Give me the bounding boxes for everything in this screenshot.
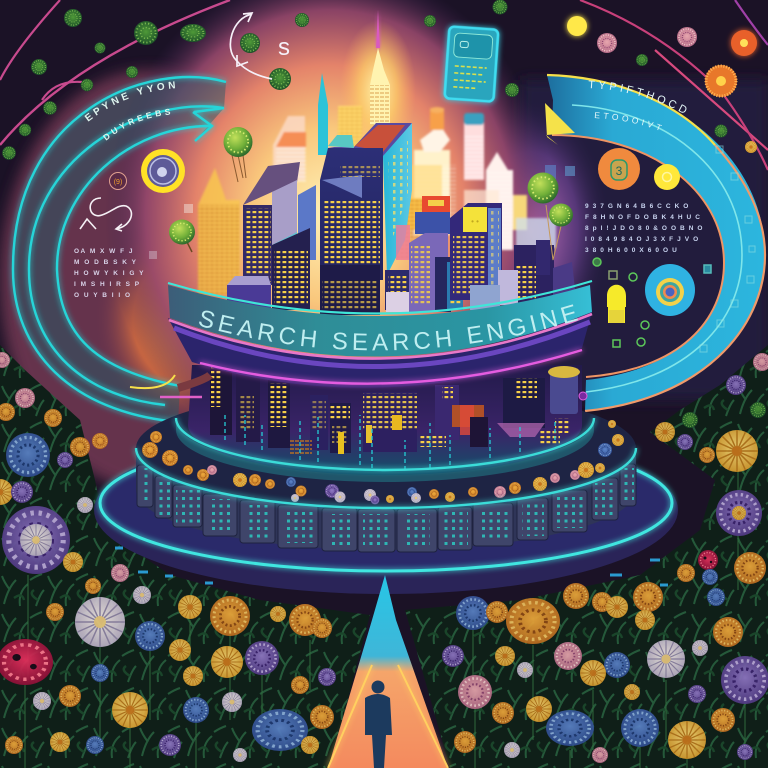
small green glyphs: [593, 258, 711, 347]
left text block: O U Y B I I O: [74, 292, 132, 299]
middle cylinder base: [176, 420, 594, 482]
light path: [328, 575, 448, 768]
search engine top band: SEARCH SEARCH ENGINE: [199, 304, 578, 350]
left text block: [74, 248, 145, 299]
server ring wall: [136, 450, 636, 550]
pink glow right of city: [450, 100, 610, 360]
band small squares: [700, 146, 755, 352]
path edges: [328, 665, 448, 768]
red sign and tower: [415, 196, 450, 234]
left panel icons: [74, 149, 193, 299]
upper city: dark foreground buildings: [227, 123, 576, 315]
top white arrow and S: [230, 13, 290, 79]
lower city: [188, 365, 587, 475]
right text block: I 0 8 4 9 8 4 O J 3 X F J V O: [585, 236, 699, 243]
yellow sign building: • •: [471, 217, 479, 226]
yellow pink arrow tail: [130, 375, 210, 397]
person silhouette: [365, 680, 392, 768]
top white arrow and S: s: [278, 34, 290, 61]
band outer edge: [547, 75, 715, 145]
left arrow labels: [84, 81, 175, 140]
pale buildings: [198, 106, 556, 295]
left curved arrows: [13, 77, 226, 422]
right panel icons: [545, 148, 711, 347]
lilac block tower: [409, 233, 463, 312]
icon: orange circle: [598, 148, 640, 190]
mid blue building behind: [272, 185, 316, 310]
left arrow labels: DUYREEBS: [102, 108, 170, 140]
orange glow: [95, 210, 285, 430]
right text block: 3 8 0 H 6 0 0 X 6 0 O U: [585, 247, 678, 254]
middle cylinder neon rim: [176, 418, 594, 470]
right cluster buildings: [227, 240, 576, 315]
tiny flower row: [142, 420, 624, 504]
orange dandelions top right: [567, 16, 757, 97]
right dark backdrop: [520, 80, 768, 400]
left warm backdrop: [0, 70, 300, 490]
base neon ring: [100, 435, 672, 571]
right text block: F 8 H N O F D O B K 4 H U C: [585, 214, 701, 221]
right arrow labels: TYPIFTHOCD: [588, 80, 686, 113]
icon: small coin: (9): [114, 179, 122, 186]
stems: [25, 470, 745, 768]
icon: white squiggle arrow: [80, 198, 131, 231]
right arrow labels: ETOOOIVT: [594, 112, 662, 130]
flowers right field: [442, 353, 768, 763]
right text block: 8 p l ! J D O 8 0 & O O B N O: [585, 225, 704, 232]
icon: yellow keyhole: [607, 285, 626, 323]
left text block: OA M X W F J: [74, 248, 134, 255]
icon: yellow circle: [654, 164, 680, 190]
right text block: [585, 203, 704, 254]
upper city: pale background towers: [198, 10, 556, 295]
band top rim: [168, 281, 592, 314]
green floating flowers top: [2, 0, 757, 160]
yellow arrowhead: [545, 103, 575, 145]
band middle line: [572, 105, 742, 392]
pink vine lines top corners: [0, 0, 768, 170]
flower field right: [405, 345, 768, 768]
inner floor: [136, 388, 636, 508]
server ring neon rim: [136, 448, 636, 508]
search engine top band: [168, 280, 592, 369]
base disc: [94, 426, 678, 594]
band bottom pink stripes: [169, 314, 592, 359]
left arrow band fills: [13, 77, 226, 422]
left text block: H O W Y K I G Y: [74, 270, 145, 277]
band underside: [168, 312, 592, 388]
magenta ring: [200, 350, 582, 384]
right text block: 9 3 7 G N 6 4 B 6 C C K O: [585, 203, 689, 210]
right arrow band: [545, 74, 766, 412]
city light glow: [100, 0, 570, 470]
server panels: [137, 464, 636, 552]
cyan spire: [318, 73, 328, 155]
left lilac building: [243, 162, 300, 285]
band inner edge: [552, 135, 724, 377]
heading: search engine: [197, 320, 578, 350]
icon: small coin: [110, 172, 126, 190]
blue ground dashes: [115, 548, 668, 585]
icon: yellow target ring: [141, 149, 185, 193]
left text block: I M S H I R S P: [74, 281, 141, 288]
left text block: M O D B S K Y: [74, 259, 137, 266]
flowers left field: [0, 352, 336, 762]
central glowing spire: [340, 10, 416, 160]
main building: [320, 123, 412, 285]
trees: [169, 127, 573, 260]
center lower buildings: [320, 265, 446, 315]
icon: orange circle: 3: [616, 164, 623, 178]
teal light strokes: [225, 415, 555, 470]
flower field left: [0, 345, 370, 768]
yellow sign building: [450, 203, 502, 300]
floating screen card: [444, 26, 498, 102]
icon: blue target circle: [645, 264, 695, 316]
